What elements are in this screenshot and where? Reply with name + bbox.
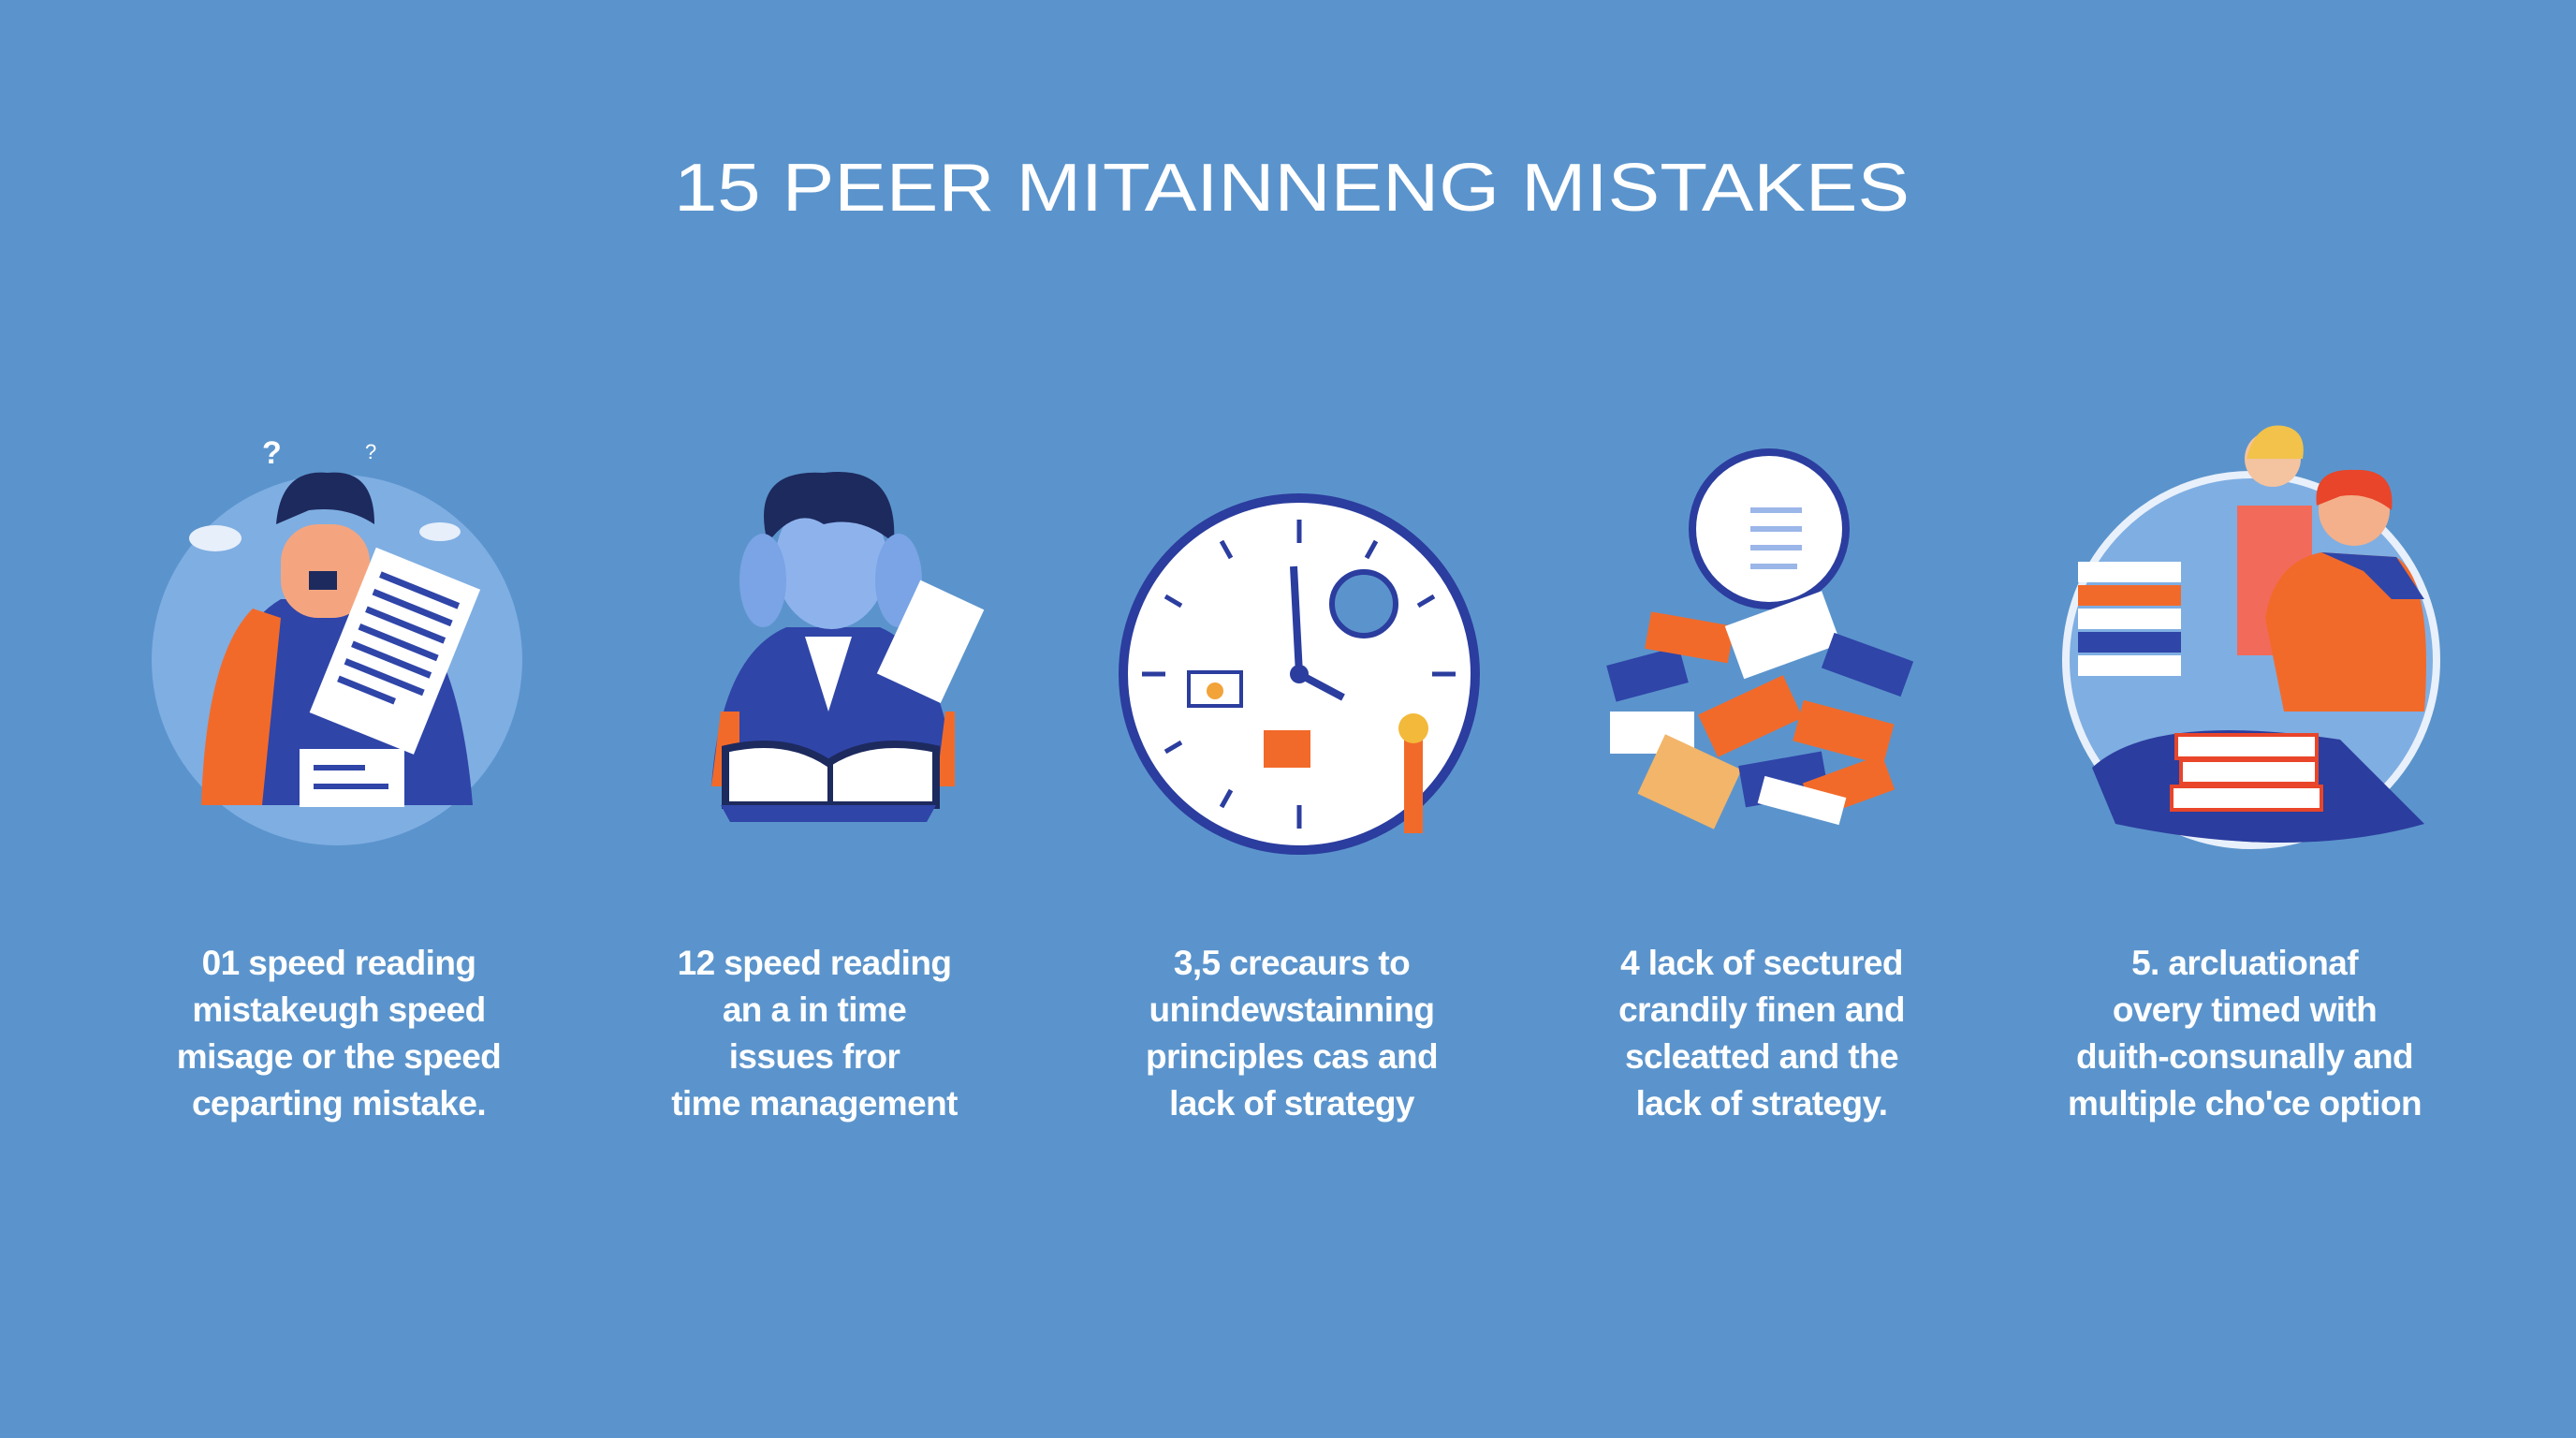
caption 5: overy timed with (2113, 990, 2377, 1029)
icon: stressed man with book (711, 472, 984, 822)
caption 2: time management (671, 1084, 958, 1123)
caption 1: ceparting mistake. (192, 1084, 486, 1123)
caption 2: 12 speed reading (678, 944, 951, 982)
caption 2 (671, 944, 958, 1123)
caption 4: lack of strategy. (1636, 1084, 1887, 1123)
caption 5: 5. arcluationaf (2131, 944, 2358, 982)
caption 1 (177, 944, 501, 1123)
caption 3: principles cas and (1146, 1037, 1438, 1076)
icon: confused man with papers: ? (365, 440, 376, 463)
title: 15 PEER MITAINNENG MISTAKES (674, 151, 1910, 226)
icon: big clock (1123, 498, 1475, 850)
caption 4 (1618, 944, 1905, 1123)
icon: students with books circle (2066, 425, 2437, 845)
caption 5: multiple cho'ce option (2068, 1084, 2422, 1123)
caption 4: 4 lack of sectured (1620, 944, 1903, 982)
caption 5 (2068, 944, 2422, 1123)
caption 3: unindewstainning (1149, 990, 1434, 1029)
caption 1: 01 speed reading (202, 944, 476, 982)
caption 2: issues fror (729, 1037, 900, 1076)
caption 3: lack of strategy (1169, 1084, 1414, 1123)
caption 1: misage or the speed (177, 1037, 501, 1076)
icon: confused man with papers: ? (262, 435, 282, 471)
icon: confused man with papers (152, 435, 522, 845)
caption 4: crandily finen and (1618, 990, 1905, 1029)
caption 4: scleatted and the (1625, 1037, 1898, 1076)
caption 3 (1146, 944, 1438, 1123)
caption 3: 3,5 crecaurs to (1174, 944, 1410, 982)
caption 5: duith-consunally and (2076, 1037, 2413, 1076)
icon: clock and book pile (1606, 452, 1913, 829)
caption 1: mistakeugh speed (192, 990, 486, 1029)
caption 2: an a in time (723, 990, 906, 1029)
